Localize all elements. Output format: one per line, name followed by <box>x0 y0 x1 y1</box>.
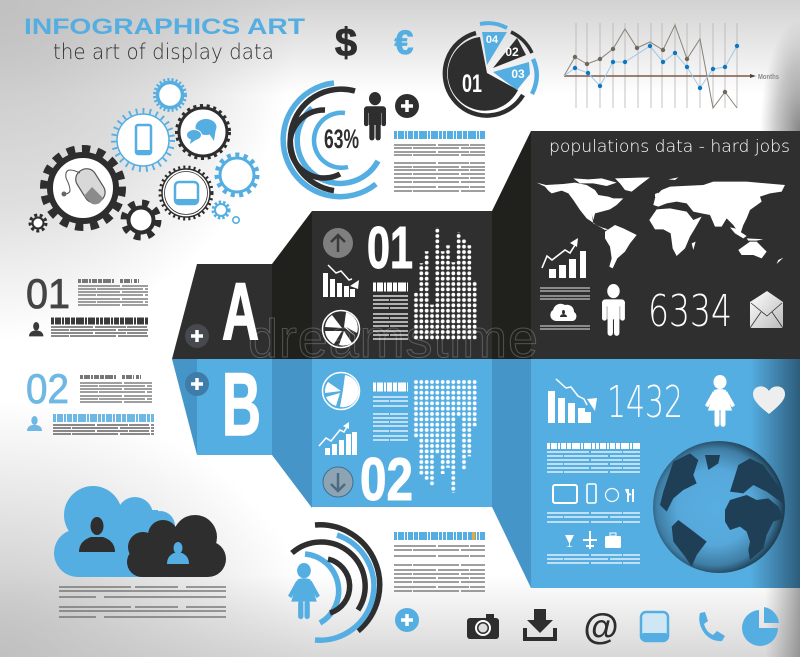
icon: pie <box>322 372 360 410</box>
left block 02 <box>26 365 154 434</box>
pie chart: 03 <box>511 67 525 81</box>
icon: bars down <box>323 265 359 297</box>
panel 01 contents <box>322 215 477 348</box>
icon: heart <box>753 386 785 414</box>
text column <box>373 387 408 440</box>
ring chart woman <box>288 525 380 640</box>
pie chart: 01 <box>462 70 482 98</box>
world map <box>537 177 785 268</box>
panel 02 contents <box>319 372 477 513</box>
gear: tiny black <box>30 215 46 231</box>
icon: tv blue <box>641 612 668 641</box>
icon: cloud white <box>550 304 576 321</box>
globe <box>653 441 785 573</box>
ring chart 63% <box>283 83 378 197</box>
heading: populations data: populations data - hard jobs <box>549 137 790 157</box>
icon: woman white <box>705 375 735 427</box>
travel icons <box>565 531 621 549</box>
gear: tiny circle <box>233 217 239 223</box>
cloud: dark <box>127 515 226 577</box>
arrow down circle <box>323 467 353 497</box>
device icons <box>553 484 633 503</box>
plus B <box>185 372 209 396</box>
gears cluster <box>30 80 257 237</box>
icon: plus dark <box>395 94 419 118</box>
wedge 03 <box>493 59 537 94</box>
gear: blue right <box>217 155 257 195</box>
number 02: 02 <box>360 446 413 513</box>
icon: plus blue <box>395 608 419 632</box>
person: blue <box>167 542 189 564</box>
pie chart: 04 <box>486 34 499 46</box>
text block blue panel <box>547 446 640 563</box>
icon: envelope <box>750 291 783 328</box>
dotted skyline <box>413 227 477 340</box>
text block top <box>394 135 485 191</box>
icon: woman blue <box>288 563 320 619</box>
gear: small blue <box>213 202 229 218</box>
band B blue <box>172 359 800 588</box>
text and cloud column dark <box>540 288 590 329</box>
number 6334: 6334 <box>648 286 732 337</box>
letter B: B <box>222 354 261 454</box>
label: 63%: 63% <box>324 124 359 154</box>
pie chart: 02 <box>505 45 519 59</box>
gear: phone <box>114 111 172 169</box>
icon: camera <box>467 614 499 639</box>
axis label: Months <box>758 74 779 81</box>
subtitle: the art of display data <box>53 40 274 64</box>
text column <box>373 287 408 339</box>
title: infographics art: INFOGRAPHICS ART <box>24 14 306 39</box>
icon: download <box>523 609 557 641</box>
plus A <box>185 324 209 348</box>
band A dark <box>172 131 800 359</box>
wedge 04 <box>480 23 507 65</box>
letter A: A <box>222 267 259 357</box>
left block 01: 01 <box>26 270 70 317</box>
text lines <box>59 587 226 617</box>
icon: bars down white <box>548 379 597 423</box>
person: dark <box>79 517 115 552</box>
gear: screen <box>161 168 211 218</box>
icon: pie blue <box>742 607 779 646</box>
arrow up circle <box>323 228 353 258</box>
icon: phone blue <box>699 612 725 641</box>
wedge 01 <box>448 37 518 111</box>
gear: mouse <box>44 149 122 227</box>
icon: dollar: $ <box>335 21 357 65</box>
gear: chat <box>178 106 228 158</box>
left block 02: 02 <box>26 365 69 412</box>
icon: at sign: @ <box>583 606 619 647</box>
cloud: blue <box>54 486 175 577</box>
gear: blue top <box>155 80 185 110</box>
wedge 02 <box>493 32 532 68</box>
number 01: 01 <box>367 215 413 281</box>
icon: man white <box>602 284 625 336</box>
left block 01 <box>26 270 149 336</box>
watermark: dreamstime <box>248 309 538 369</box>
icon: bars up <box>319 422 357 455</box>
icon: bars up white <box>542 238 586 278</box>
icon: man dark <box>364 92 386 140</box>
number 1432: 1432 <box>607 377 683 428</box>
clouds <box>54 486 226 617</box>
gear: spike black <box>124 203 158 237</box>
line chart <box>564 23 779 108</box>
dotted data <box>413 379 477 493</box>
text block bottom <box>394 532 485 591</box>
pie chart <box>445 23 537 116</box>
icon: euro: € <box>395 24 414 62</box>
icon: pie <box>322 310 360 348</box>
